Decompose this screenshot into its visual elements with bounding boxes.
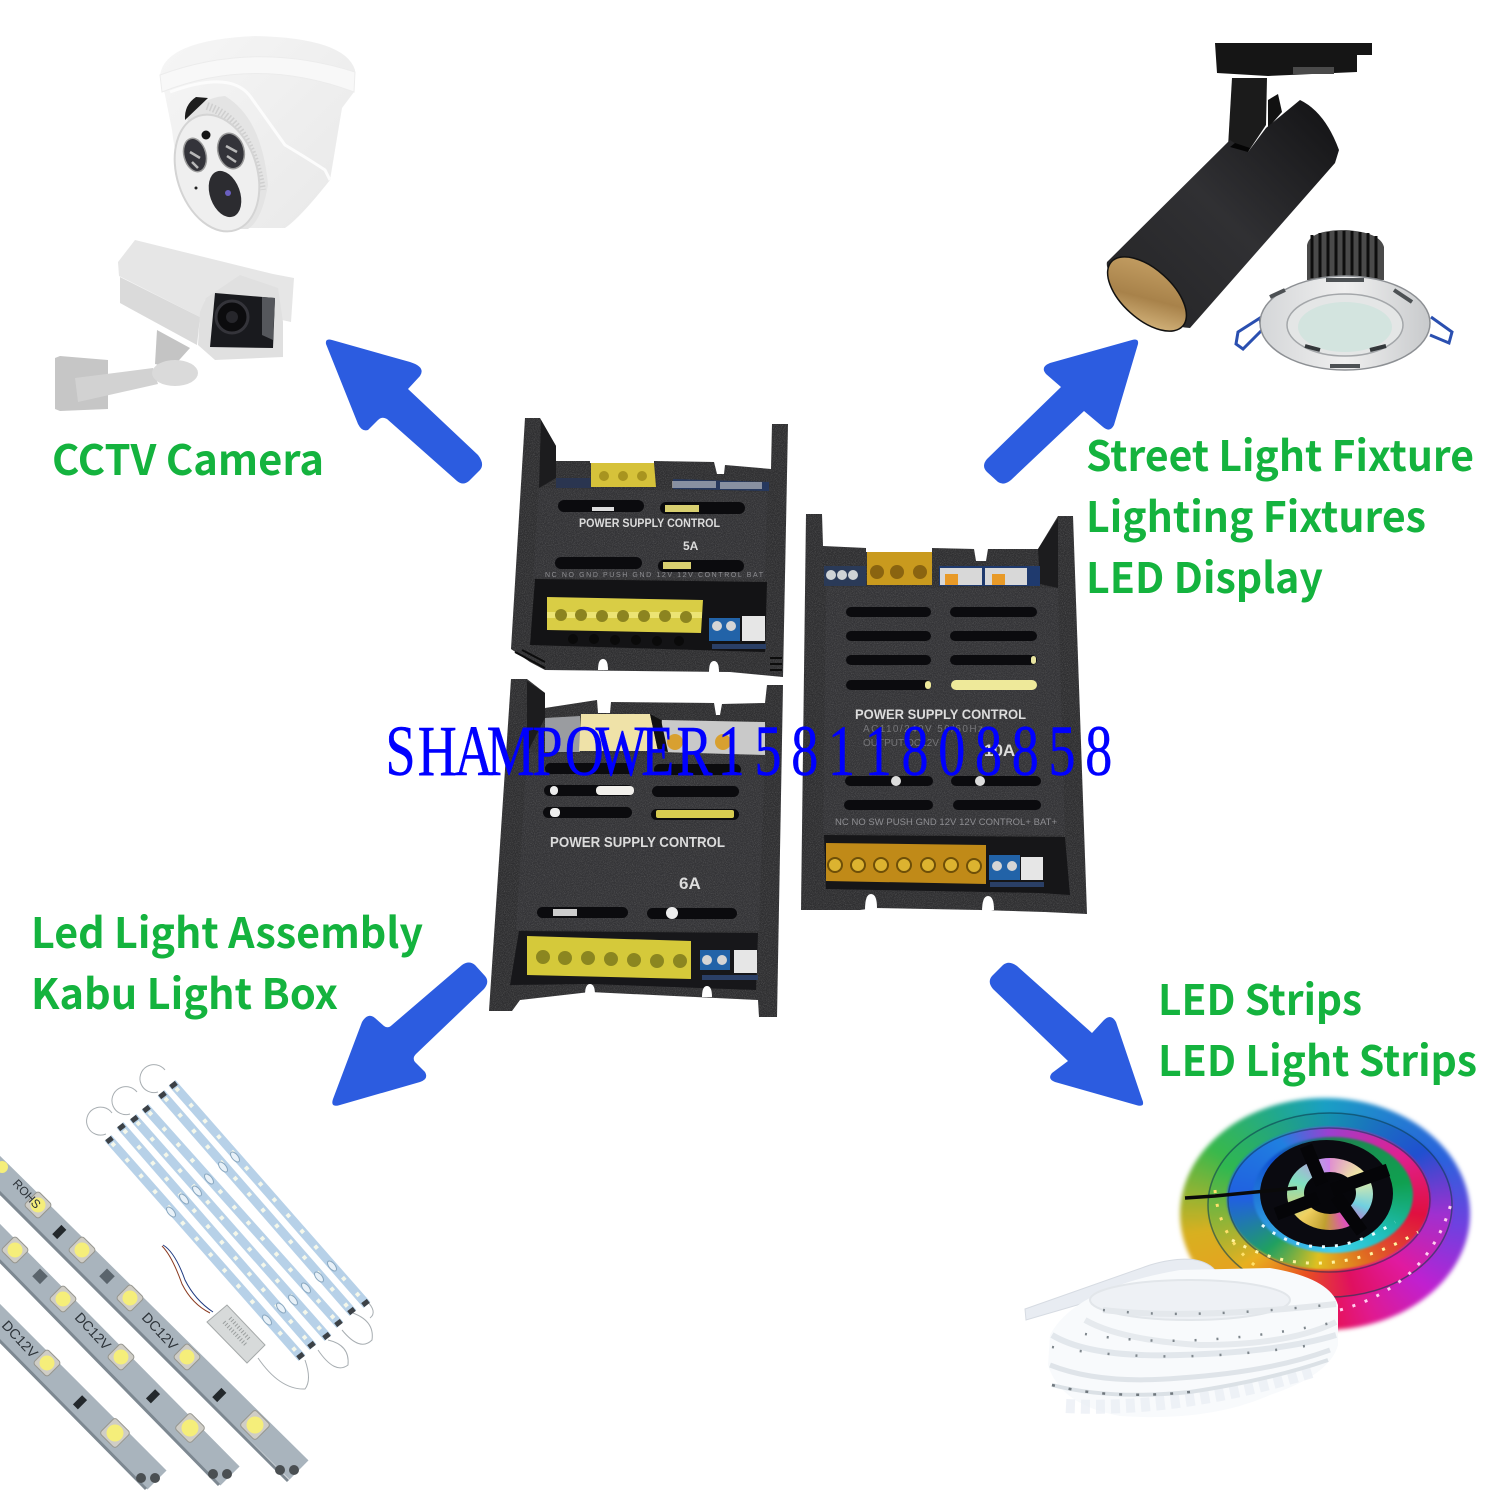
power supply unit: 10A: POWER SUPPLY CONTROL [855, 706, 1026, 722]
icon: LED rigid strips DC12V: DC12V [72, 1309, 115, 1354]
arrow: to LED light assembly [332, 962, 487, 1106]
icon: black track spotlight [1095, 43, 1372, 345]
icon: box CCTV camera [55, 240, 294, 411]
arrow: to LED strips [990, 963, 1143, 1106]
power supply unit: 5A: NC NO GND PUSH GND 12V 12V CONTROL BAT [545, 572, 764, 579]
label: Lighting Fixtures: Lighting Fixtures [1086, 484, 1426, 545]
power supply unit: 10A: OUTPUT DC12V [863, 738, 939, 749]
power supply unit: 5A: 5A [683, 539, 699, 553]
power supply unit: 10A: AC110/240V 50/60Hz [863, 724, 983, 735]
icon: LED rigid strips DC12V: ROHS [10, 1176, 44, 1211]
power supply unit: 6A: POWER SUPPLY CONTROL [550, 835, 725, 851]
label: Led Light Assembly: Led Light Assembly [31, 900, 423, 961]
label: Kabu Light Box: Kabu Light Box [31, 961, 338, 1022]
icon: thin LED light bars [87, 1065, 373, 1389]
icon: dome CCTV camera [160, 36, 355, 242]
power supply unit: 6A: 6A [679, 874, 701, 893]
watermark: SHAMPOWER15811808858 [385, 711, 1112, 791]
power supply unit: 5A [511, 418, 788, 677]
icon: white LED strip coil [1025, 1259, 1338, 1417]
icon: LED rigid strips DC12V: DC12V [139, 1309, 182, 1354]
arrow: to lighting fixtures [984, 340, 1138, 484]
arrow: to CCTV camera [326, 340, 482, 484]
power supply unit: 5A: POWER SUPPLY CONTROL [579, 518, 720, 530]
power supply unit: 6A [489, 679, 783, 1017]
icon: RGB LED strip reel glow [1176, 1094, 1474, 1333]
power supply unit: 10A: 10A [984, 741, 1015, 760]
icon: LED rigid strips DC12V: DC12V [0, 1317, 42, 1362]
icon: RGB LED reel spokes and LEDs [1185, 1113, 1452, 1310]
label: CCTV Camera: CCTV Camera [52, 427, 324, 488]
icon: recessed LED downlight [1236, 230, 1452, 370]
power supply unit: 10A: NC NO SW PUSH GND 12V 12V CONTROL+ BAT+ [835, 817, 1057, 828]
label: LED Strips: LED Strips [1158, 967, 1362, 1028]
label: LED Display: LED Display [1086, 545, 1323, 606]
power supply unit: 10A [801, 514, 1087, 914]
label: Street Light Fixture: Street Light Fixture [1086, 423, 1474, 484]
icon: LED rigid strips DC12V [0, 1161, 299, 1489]
label: LED Light Strips: LED Light Strips [1158, 1028, 1477, 1089]
